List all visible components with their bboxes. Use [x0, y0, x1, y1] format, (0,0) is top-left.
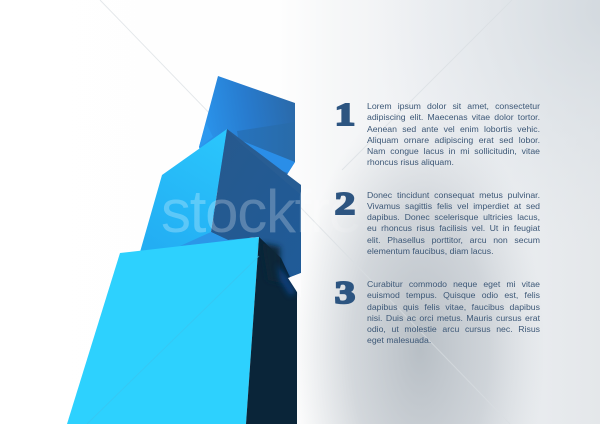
paragraph 1: Nam congue lacus in mi sollicitudin, vitae [367, 146, 540, 156]
number 2: 2 [335, 184, 355, 220]
paragraph 3: euismod tempus. Quisque odio est, felis [367, 290, 540, 300]
top cube [199, 76, 295, 190]
paragraph 1: adipiscing elit. Maecenas vitae dolor tortor. [367, 112, 540, 122]
text block 3 [335, 274, 540, 345]
paragraph 3: Curabitur commodo neque eget mi vitae [367, 279, 540, 289]
watermark: stockfresh [161, 178, 423, 245]
paragraph 2: dapibus. Donec scelerisque ultricies lacus, [367, 212, 540, 222]
paragraph 3: odio, ut molestie arcu cursus nec. Risus [367, 324, 540, 334]
paragraph 1: Aenean sed ante vel enim lobortis vehic. [367, 124, 540, 134]
paragraph 2 [367, 190, 540, 256]
paragraph 2: elementum faucibus, diam lacus. [367, 246, 494, 256]
paragraph 1: Aliquam ornare adipiscing erat sed lobor. [367, 135, 540, 145]
paragraph 3: eget malesuada. [367, 335, 431, 345]
paragraph 2: Vivamus sagittis felis vel imperdiet at sed [367, 201, 540, 211]
white notch [288, 273, 301, 298]
paragraph 2: Donec tincidunt consequat metus pulvinar. [367, 190, 540, 200]
text block 2 [335, 184, 540, 256]
paragraph 2: elit. Phasellus porttitor, arcu non secum [367, 234, 540, 244]
paragraph 1 [367, 101, 540, 167]
paragraph 1: rhoncus risus aliquam. [367, 157, 454, 167]
number 1: 1 [335, 96, 355, 132]
paragraph 3: dapibus quis felis vitae, faucibus dapibus [367, 302, 540, 312]
front cube [67, 237, 297, 424]
middle cube [140, 129, 301, 278]
paragraph 3 [367, 279, 540, 345]
text block 1 [335, 96, 540, 167]
number 3: 3 [335, 274, 355, 310]
paragraph 3: nisi. Duis ac orci metus. Mauris cursus erat [367, 313, 540, 323]
paragraph 2: eu rhoncus risus facilisis vel. Ut in feugiat [367, 223, 540, 233]
paragraph 1: Lorem ipsum dolor sit amet, consectetur [367, 101, 540, 111]
